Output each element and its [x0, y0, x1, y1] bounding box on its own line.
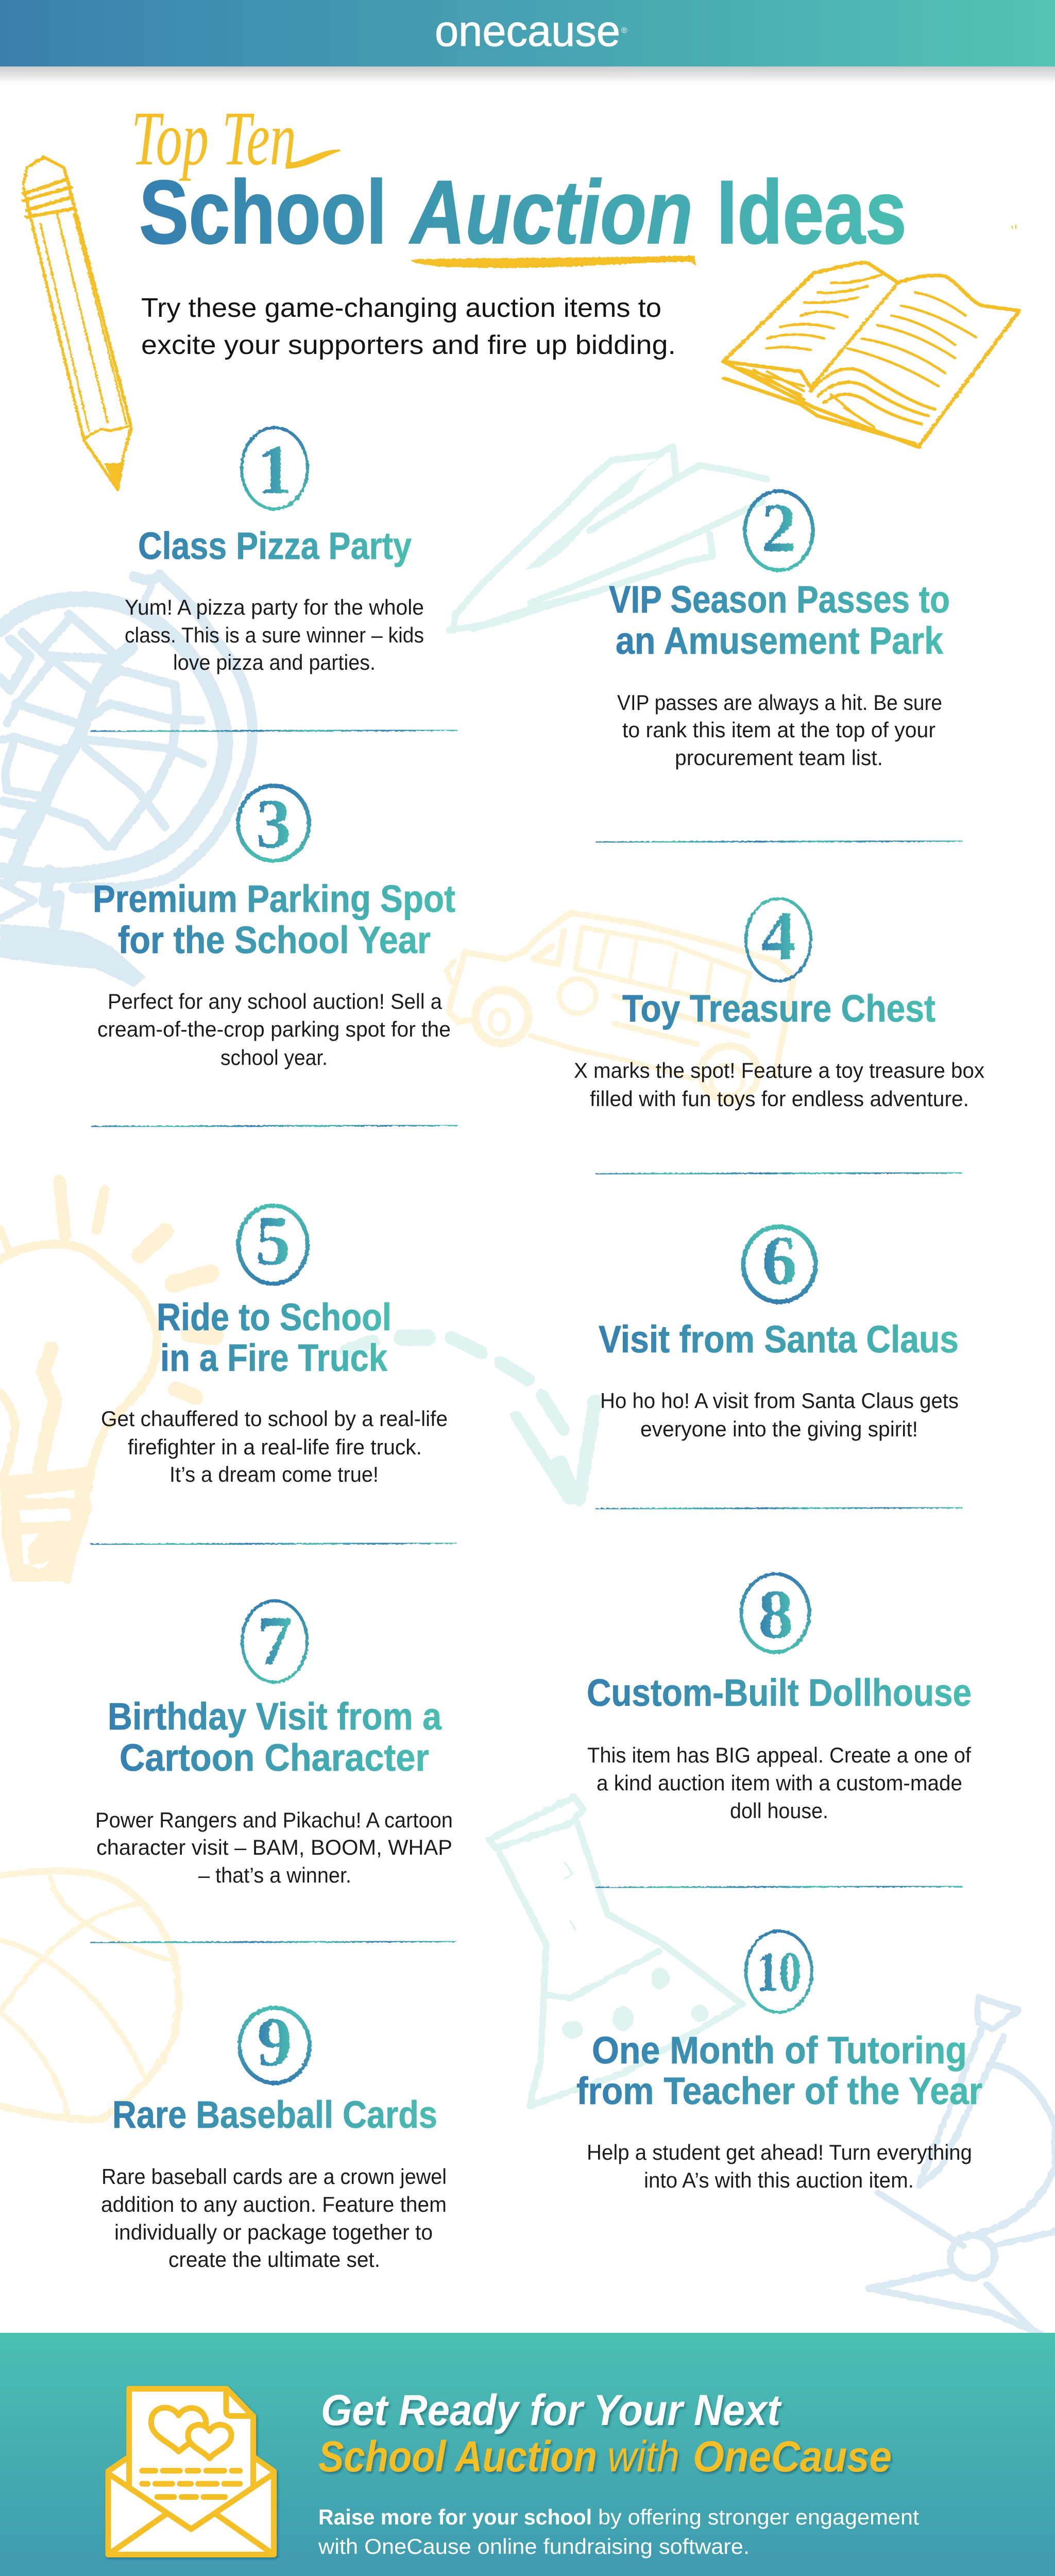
body: [574, 1058, 984, 1111]
body: [125, 595, 424, 674]
doodle: light bulb: [0, 1181, 215, 1582]
body: [617, 690, 942, 770]
heading: Rare Baseball Cards: [112, 2093, 437, 2136]
footer heading: with: [607, 2432, 679, 2481]
number badge 1: 1: [257, 431, 292, 509]
main heading: School: [139, 162, 387, 263]
number badge 10: [746, 1931, 812, 2012]
heading: from Teacher of the Year: [576, 2070, 982, 2112]
body: This item has BIG appeal. Create a one of: [587, 1743, 971, 1767]
number badge 7: [242, 1601, 307, 1682]
heading: for the School Year: [118, 919, 431, 961]
item 6: [599, 1222, 959, 1441]
number badge 6: 6: [762, 1222, 797, 1299]
body: into A’s with this auction item.: [644, 2168, 914, 2192]
footer body text: Raise more for your school: [318, 2505, 592, 2529]
number badge 8: [741, 1574, 809, 1653]
panel: footer call to action: [0, 2333, 1055, 2576]
body: – that’s a winner.: [198, 1863, 351, 1887]
body: [587, 2140, 972, 2192]
footer heading: OneCause: [693, 2432, 892, 2481]
body: to rank this item at the top of your: [622, 718, 935, 742]
specks: [1012, 225, 1016, 229]
footer heading: School Auction: [318, 2432, 597, 2481]
body: Help a student get ahead! Turn everything: [587, 2140, 972, 2164]
body: love pizza and parties.: [173, 650, 376, 674]
item 1: [125, 428, 424, 674]
footer body text: [318, 2505, 919, 2558]
body: create the ultimate set.: [168, 2247, 380, 2272]
body: Get chauffered to school by a real-life: [101, 1406, 448, 1431]
body: addition to any auction. Feature them: [101, 2192, 447, 2216]
doodle: small globe: [869, 1997, 1055, 2334]
body: Ho ho ho! A visit from Santa Claus gets: [600, 1388, 959, 1413]
number badge 8: 8: [758, 1576, 793, 1653]
item 10: [576, 1931, 982, 2192]
header bar: [0, 0, 1055, 84]
body: [95, 1808, 453, 1887]
intro text: [141, 293, 676, 360]
footer body text: by offering stronger engagement: [598, 2505, 919, 2529]
number badge 10: 10: [756, 1940, 802, 2003]
heading: in a Fire Truck: [160, 1336, 388, 1379]
heading: VIP Season Passes to: [609, 578, 950, 621]
heading: [576, 2029, 982, 2112]
heading: One Month of Tutoring: [592, 2029, 967, 2072]
body: [101, 1406, 448, 1486]
body: a kind auction item with a custom-made: [597, 1771, 962, 1795]
body: Yum! A pizza party for the whole: [125, 595, 424, 619]
icon: open book: [723, 263, 1019, 447]
body: X marks the spot! Feature a toy treasure box: [574, 1058, 984, 1082]
main heading: Auction: [409, 162, 693, 263]
number badge 4: [746, 897, 811, 981]
item 3: [93, 785, 455, 1070]
item 9: [101, 2004, 447, 2272]
body: It’s a dream come true!: [169, 1462, 379, 1486]
icon: pencil: [24, 157, 131, 492]
heading: [93, 877, 455, 961]
body: class. This is a sure winner – kids: [125, 623, 424, 647]
body: VIP passes are always a hit. Be sure: [617, 690, 942, 715]
number badge 2: 2: [761, 489, 796, 567]
number badge 3: 3: [256, 785, 291, 862]
main heading: [139, 162, 907, 263]
number badge 9: 9: [257, 2004, 292, 2081]
body: cream-of-the-crop parking spot for the: [97, 1017, 451, 1041]
intro text: Try these game-changing auction items to: [141, 293, 661, 323]
number badge 4: 4: [761, 897, 796, 975]
heading: Premium Parking Spot: [93, 877, 455, 920]
footer heading: Get Ready for Your Next: [321, 2386, 782, 2434]
body: Perfect for any school auction! Sell a: [108, 989, 443, 1013]
item 8: [587, 1574, 972, 1823]
footer body text: with OneCause online fundraising software.: [318, 2534, 750, 2558]
doodle: paper plane: [449, 447, 767, 630]
intro text: excite your supporters and fire up bidding.: [141, 330, 676, 360]
footer heading: [318, 2386, 892, 2481]
body: doll house.: [730, 1799, 828, 1823]
number badge 2: [745, 489, 813, 570]
body: school year.: [220, 1045, 328, 1070]
heading: Cartoon Character: [120, 1736, 429, 1779]
doodle: school bus: [447, 913, 794, 1101]
heading: Custom-Built Dollhouse: [587, 1671, 972, 1714]
body: Power Rangers and Pikachu! A cartoon: [95, 1808, 453, 1832]
logo: onecause: onecause: [435, 7, 620, 55]
number badge 1: [242, 428, 308, 509]
body: [97, 989, 451, 1070]
number badge 5: [239, 1202, 308, 1284]
body: filled with fun toys for endless adventure.: [590, 1087, 969, 1111]
item 7: [95, 1601, 453, 1887]
heading: Toy Treasure Chest: [622, 987, 935, 1030]
body: everyone into the giving spirit!: [640, 1417, 918, 1441]
script heading: Top Ten: Top Ten: [131, 96, 296, 181]
item 4: [574, 897, 984, 1111]
heading: Ride to School: [157, 1296, 392, 1338]
number badge 3: [238, 785, 309, 862]
heading: Class Pizza Party: [138, 524, 412, 567]
heading: [609, 578, 950, 662]
body: procurement team list.: [675, 745, 883, 770]
body: [101, 2164, 447, 2272]
body: firefighter in a real-life fire truck.: [128, 1435, 422, 1459]
number badge 5: 5: [256, 1202, 291, 1280]
doodle: globe: [0, 575, 252, 987]
doodle: dashed arrow: [347, 1337, 595, 1499]
icon: envelope with hearts: [108, 2389, 274, 2554]
logo: onecause: ®: [621, 26, 627, 35]
doodle: basketball: [0, 1871, 179, 2120]
heading: [157, 1296, 392, 1379]
body: character visit – BAM, BOOM, WHAP: [96, 1835, 452, 1859]
body: [587, 1743, 971, 1823]
body: Rare baseball cards are a crown jewel: [101, 2164, 447, 2189]
number badge 7: 7: [257, 1602, 292, 1680]
item 5: [101, 1202, 448, 1486]
heading: an Amusement Park: [616, 619, 944, 662]
heading: [108, 1695, 442, 1779]
heading: Visit from Santa Claus: [599, 1318, 959, 1361]
item 2: [609, 489, 950, 770]
main heading: Ideas: [717, 162, 907, 263]
title group: [131, 96, 907, 360]
body: individually or package together to: [114, 2220, 433, 2244]
heading: Birthday Visit from a: [108, 1695, 442, 1738]
yellow brush underline: [411, 256, 696, 268]
doodle: flask: [489, 1797, 743, 2106]
number badge 6: [743, 1222, 815, 1302]
body: [600, 1388, 959, 1441]
number badge 9: [240, 2004, 310, 2083]
